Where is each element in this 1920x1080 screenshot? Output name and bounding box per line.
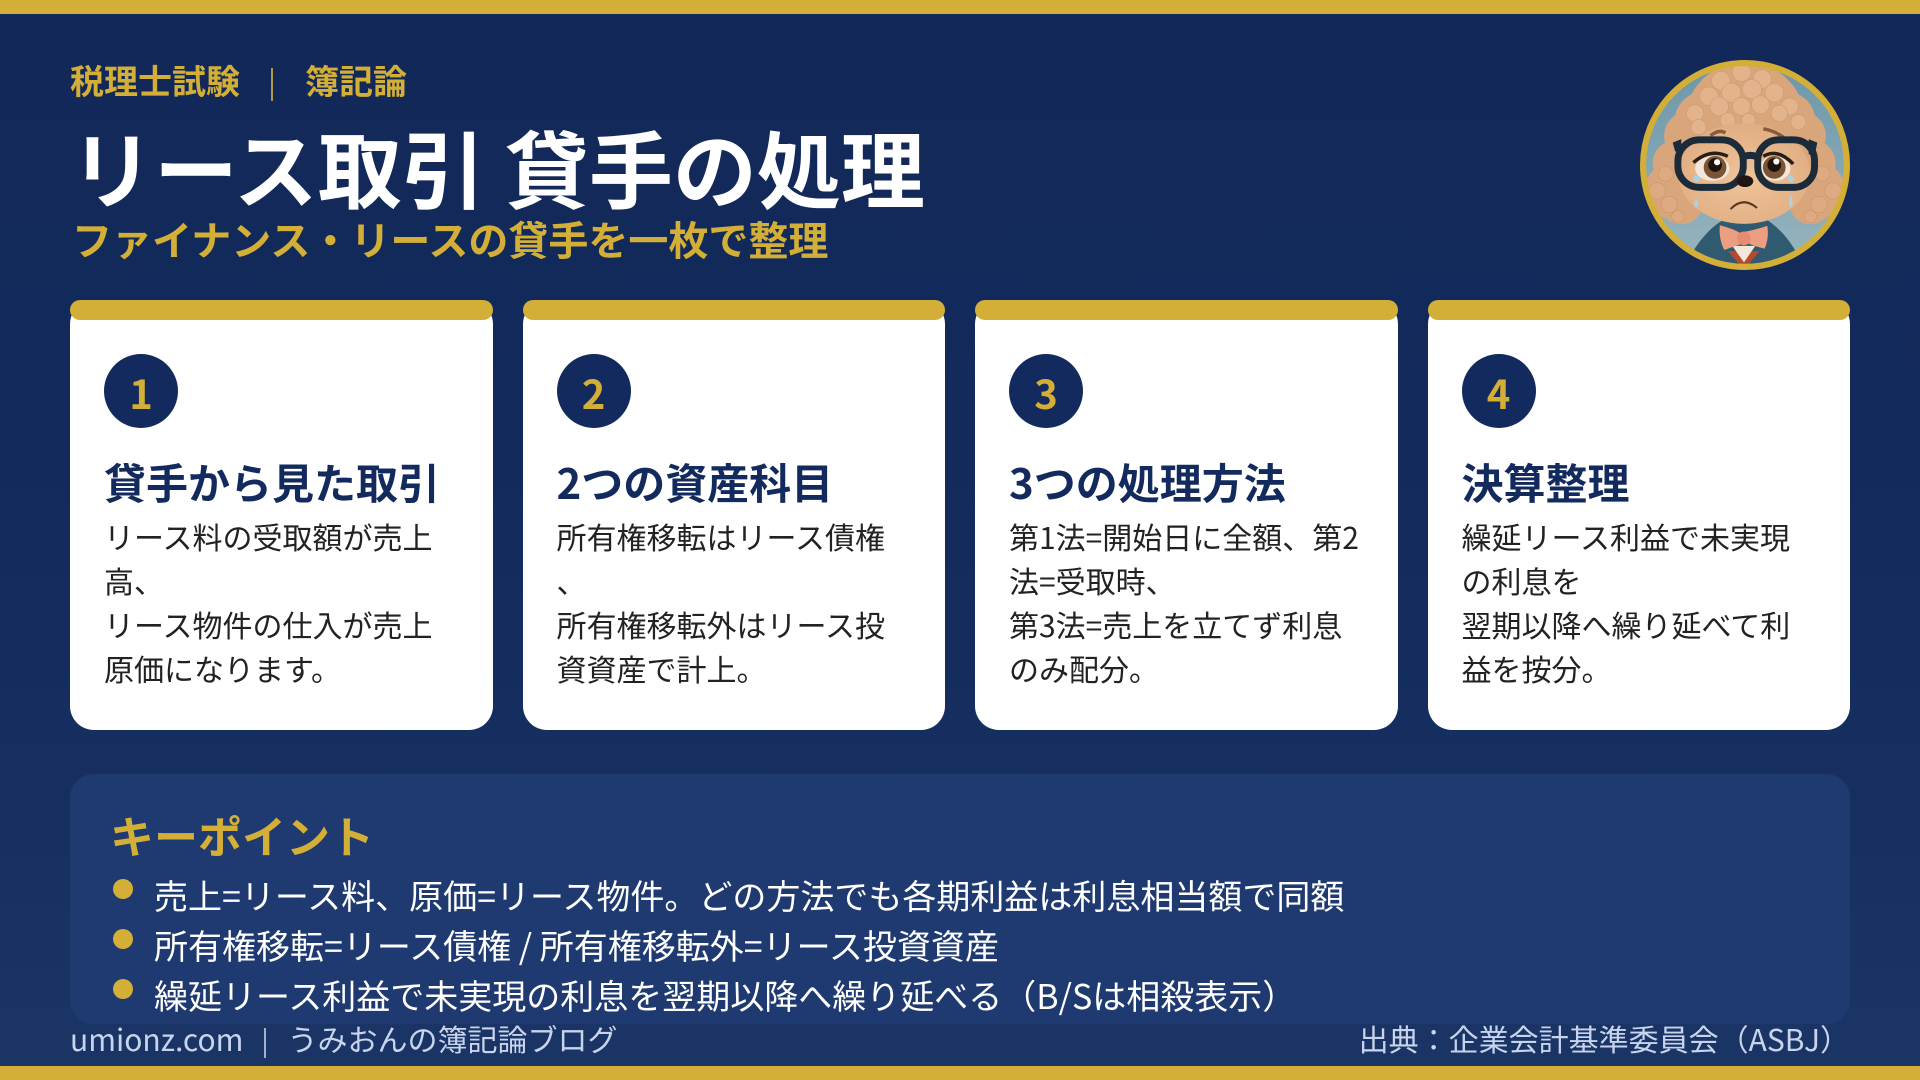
footer right: 出典：企業会計基準委員会（ASBJ） bbox=[1359, 1016, 1850, 1060]
brows bbox=[1711, 131, 1725, 136]
bullet 3 bbox=[113, 979, 133, 999]
card 2 body bbox=[556, 514, 885, 690]
card 4 body: 翌期以降へ繰り延べて利 bbox=[1462, 602, 1790, 646]
card 1 accent bar bbox=[70, 300, 492, 320]
card 1 bbox=[70, 300, 492, 730]
card 2 accent bar bbox=[522, 300, 945, 320]
bow bbox=[1720, 225, 1768, 250]
card 1 body: 高、 bbox=[104, 558, 164, 602]
card 2 number: 2 bbox=[582, 363, 605, 421]
card 4 accent bar bbox=[1428, 300, 1850, 320]
icon: crying poodle avatar bbox=[1640, 60, 1850, 270]
exam label: 税理士試験 簿記論 bbox=[70, 55, 407, 104]
card 3 heading: 3つの処理方法 bbox=[1009, 451, 1286, 512]
card 2 bbox=[522, 300, 945, 730]
card 4 body: 繰延リース利益で未実現 bbox=[1462, 514, 1790, 558]
card 3 bbox=[975, 300, 1398, 730]
glasses bbox=[1678, 140, 1815, 187]
card 2 number bbox=[556, 354, 630, 428]
key points heading: キーポイント bbox=[110, 802, 374, 866]
card 2 body: 、 bbox=[556, 558, 586, 602]
card 1 heading: 貸手から見た取引 bbox=[104, 451, 440, 512]
card 1 body: リース物件の仕入が売上 bbox=[104, 602, 432, 646]
card 3 body: 第3法=売上を立てず利息 bbox=[1009, 602, 1342, 646]
card 4 bbox=[1428, 300, 1850, 730]
card 4 body: 益を按分。 bbox=[1462, 646, 1612, 690]
point 2: 所有権移転=リース債権 / 所有権移転外=リース投資資産 bbox=[154, 920, 999, 969]
card 3 number bbox=[1009, 354, 1083, 428]
card 1 body: リース料の受取額が売上 bbox=[104, 514, 432, 558]
card 4 number bbox=[1462, 354, 1536, 428]
eyes bbox=[1695, 156, 1730, 181]
card 1 number: 1 bbox=[129, 363, 153, 421]
face bbox=[1678, 123, 1810, 224]
card 3 body bbox=[1009, 514, 1359, 690]
card 3 number: 3 bbox=[1034, 363, 1058, 421]
top gold bar bbox=[0, 0, 1920, 14]
card 2 body: 資資産で計上。 bbox=[556, 646, 766, 690]
bullet 2 bbox=[113, 929, 133, 949]
card 2 body: 所有権移転はリース債権 bbox=[556, 514, 885, 558]
card 3 accent bar bbox=[975, 300, 1398, 320]
card 1 number bbox=[104, 354, 178, 428]
footer left: umionz.com うみおんの簿記論ブログ bbox=[70, 1016, 617, 1060]
panel: key points bbox=[70, 774, 1850, 1024]
card 2 heading: 2つの資産科目 bbox=[556, 451, 833, 512]
tears bbox=[1694, 198, 1698, 208]
card 4 body bbox=[1462, 514, 1790, 690]
card 3 body: 第1法=開始日に全額、第2 bbox=[1009, 514, 1359, 558]
title: リース取引 貸手の処理 bbox=[70, 106, 925, 227]
subtitle: ファイナンス・リースの貸手を一枚で整理 bbox=[72, 209, 828, 267]
hair bbox=[1644, 62, 1846, 224]
bullet 1 bbox=[113, 879, 133, 899]
bottom gold bar bbox=[0, 1066, 1920, 1080]
card 2 body: 所有権移転外はリース投 bbox=[556, 602, 885, 646]
mouth bbox=[1731, 202, 1757, 209]
card 1 body bbox=[104, 514, 432, 690]
nose bbox=[1737, 175, 1753, 187]
card 4 body: の利息を bbox=[1462, 558, 1582, 602]
point 1: 売上=リース料、原価=リース物件。どの方法でも各期利益は利息相当額で同額 bbox=[154, 870, 1344, 919]
jacket bbox=[1694, 220, 1795, 264]
card 1 body: 原価になります。 bbox=[104, 646, 341, 690]
card 3 body: のみ配分。 bbox=[1009, 646, 1159, 690]
point 3: 繰延リース利益で未実現の利息を翌期以降へ繰り延べる（B/Sは相殺表示） bbox=[154, 970, 1296, 1019]
card 4 number: 4 bbox=[1487, 363, 1510, 421]
card 4 heading: 決算整理 bbox=[1462, 451, 1630, 512]
card 3 body: 法=受取時、 bbox=[1009, 558, 1176, 602]
